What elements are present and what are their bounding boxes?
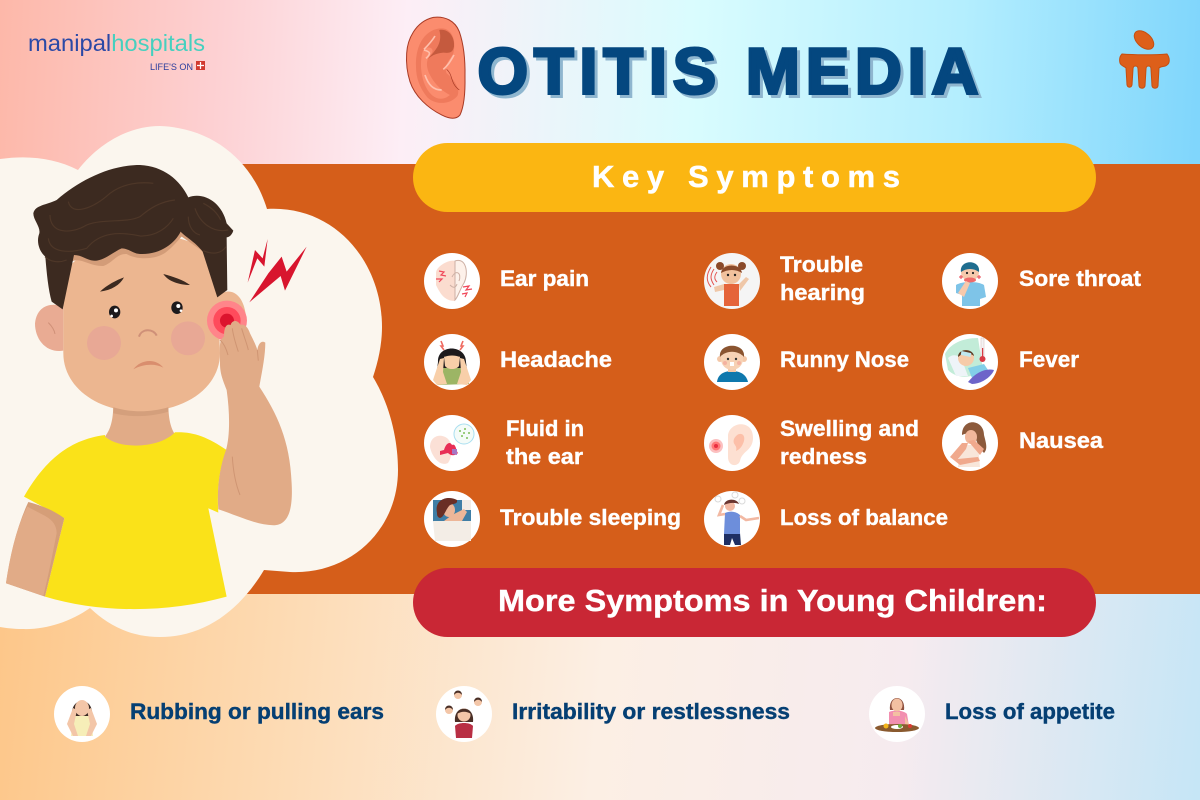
- symptom: runny nose: [704, 334, 909, 390]
- cheeks: [87, 326, 121, 360]
- child symptom: rubbing or pulling ears: Rubbing or pulling ears: [130, 699, 384, 724]
- pain bolts: [248, 239, 268, 283]
- symptom: headache: [424, 334, 612, 390]
- child symptom: loss of appetite: Loss of appetite: [945, 699, 1115, 724]
- symptom: runny nose: Runny Nose: [780, 347, 909, 372]
- eyebrows: [100, 277, 124, 292]
- child symptom: irritability or restlessness: [436, 686, 790, 742]
- cloud background: [0, 126, 398, 637]
- symptom: sore throat: [942, 253, 1142, 309]
- heading: More Symptoms in Young Children: [413, 568, 1096, 637]
- symptom: swelling and redness: [704, 415, 919, 471]
- icon: brand mark: [1120, 27, 1169, 88]
- logo: Manipal Hospitals: LIFE'S ON: [150, 62, 193, 73]
- raised arm and hand: [218, 321, 292, 525]
- title: OTITIS MEDIA: [478, 34, 978, 108]
- symptom: loss of balance: Loss of balance: [780, 505, 948, 530]
- mouth: [133, 361, 163, 369]
- neck: [105, 403, 175, 447]
- symptom: nausea: Nausea: [1019, 428, 1104, 453]
- symptom: nausea: [942, 415, 1104, 471]
- left arm: [6, 502, 64, 597]
- symptom: trouble sleeping: [424, 491, 681, 547]
- t-shirt: [24, 432, 227, 609]
- symptom: loss of balance: [704, 491, 948, 547]
- left ear: [35, 305, 63, 351]
- hair strands: [45, 183, 228, 262]
- symptom: trouble sleeping: Trouble sleeping: [500, 505, 681, 530]
- symptom: swelling and redness: Swelling and: [780, 416, 919, 441]
- neck shadow: [113, 407, 168, 416]
- illustration: boy with ear pain: [0, 126, 398, 637]
- symptom: sore throat: Sore throat: [1019, 266, 1142, 291]
- sore spot rings: [207, 301, 247, 341]
- nose: [139, 330, 157, 337]
- symptom: ear pain: [424, 253, 589, 309]
- face: [63, 237, 220, 412]
- symptom: fever: [942, 334, 1079, 390]
- logo: Manipal Hospitals: [28, 30, 205, 73]
- symptom: swelling and redness: redness: [780, 444, 867, 469]
- child symptom: rubbing or pulling ears: [54, 686, 384, 742]
- hair: [33, 165, 233, 309]
- symptom: fever: Fever: [1019, 347, 1079, 372]
- icon: ear: [406, 17, 465, 118]
- symptom: fluid in the ear: Fluid in: [506, 416, 584, 441]
- panel: orange symptoms band: [240, 164, 1200, 594]
- heading: Key Symptoms: [413, 143, 1096, 212]
- heading: More Symptoms in Young Children: More Symptoms in Young Children:: [498, 583, 1047, 618]
- right ear: [217, 291, 246, 333]
- child symptom: loss of appetite: [869, 686, 1115, 742]
- heading: Key Symptoms: Key Symptoms: [592, 159, 900, 194]
- symptom: fluid in the ear: the ear: [506, 444, 583, 469]
- symptom: headache: Headache: [500, 347, 612, 372]
- logo: Manipal Hospitals: manipalhospitals: [28, 30, 205, 56]
- symptom: trouble hearing: Trouble: [780, 252, 863, 277]
- symptom: ear pain: Ear pain: [500, 266, 589, 291]
- symptom: fluid in the ear: [424, 415, 584, 471]
- child symptom: irritability or restlessness: Irritability or restlessness: [512, 699, 790, 724]
- symptom: trouble hearing: [704, 252, 865, 309]
- symptom: trouble hearing: hearing: [780, 280, 865, 305]
- eyes: [109, 306, 120, 318]
- hair fringe shadow: [72, 227, 203, 266]
